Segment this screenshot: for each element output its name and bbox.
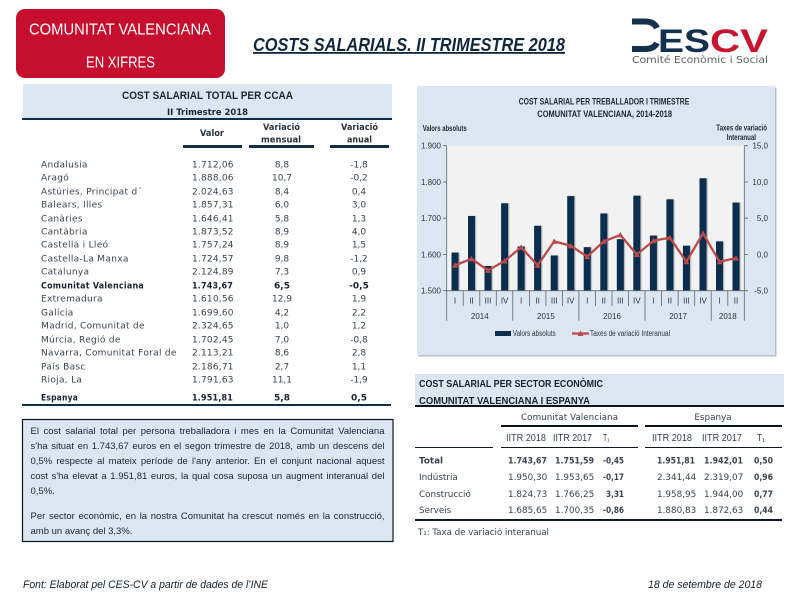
- region rows: 2,2: [352, 308, 366, 318]
- region rows: 1.757,24: [192, 240, 234, 250]
- group headers: Comunitat Valenciana: [521, 413, 618, 423]
- quarter labels: I: [454, 296, 456, 306]
- quarter labels: IV: [699, 296, 707, 306]
- table heading band: [22, 84, 392, 120]
- column headers: Valor: [200, 129, 225, 139]
- region rows: 1.724,57: [192, 254, 234, 264]
- region rows: 9,8: [275, 254, 289, 264]
- left axis labels: 1.800: [421, 178, 442, 187]
- quarter labels: III: [683, 296, 690, 306]
- region rows: 8,9: [275, 227, 289, 237]
- table heading band: COST SALARIAL PER SECTOR ECONÒMIC: [419, 377, 603, 390]
- left axis labels: [421, 142, 442, 296]
- region rows: 7,0: [275, 335, 289, 345]
- region rows: Madrid, Comunitat de: [41, 321, 145, 331]
- region rows: -1,9: [350, 375, 368, 385]
- sector rows: 3,31: [606, 490, 624, 500]
- quarter labels: III: [617, 296, 624, 306]
- region rows: 11,1: [272, 375, 292, 385]
- quarter labels: I: [718, 296, 721, 306]
- column headers: IITR 2017: [702, 433, 742, 444]
- sector rows: 1.942,01: [704, 457, 743, 467]
- region rows: 1.857,31: [192, 200, 234, 210]
- region rows: Aragó: [41, 172, 69, 183]
- right axis labels: 5,0: [757, 214, 769, 223]
- panel: cost salarial per sector econòmic table: [415, 374, 784, 538]
- chart title: [519, 97, 689, 119]
- right axis labels: 10,0: [752, 178, 769, 187]
- region rows: 1,3: [352, 214, 366, 224]
- sector rows: 1.872,63: [704, 506, 743, 516]
- table heading band: [415, 374, 784, 407]
- table heading band: COMUNITAT VALENCIANA I ESPANYA: [419, 395, 590, 407]
- region rows: Comunitat Valenciana: [41, 281, 144, 291]
- legend: [495, 329, 670, 338]
- region rows: 10,7: [272, 173, 292, 183]
- axis titles: [423, 123, 767, 142]
- region rows: 2.186,71: [192, 362, 234, 372]
- left axis labels: 1.700: [421, 214, 442, 223]
- quarter labels: II: [602, 296, 606, 306]
- region rows: Extremadura: [41, 294, 103, 304]
- sector rows: 0,96: [754, 473, 773, 483]
- column headers: anual: [347, 136, 372, 146]
- column headers: IITR 2017: [553, 433, 592, 444]
- sector rows: Total: [419, 457, 443, 467]
- sector rows: 1.685,65: [508, 506, 547, 516]
- text block: summary: El cost salarial total per persona treballadora i mes en la Comunitat Valenciana: [30, 426, 384, 436]
- table heading band: COST SALARIAL TOTAL PER CCAA: [122, 90, 293, 102]
- region rows: 1.951,81: [192, 393, 233, 403]
- column headers: IITR 2018: [506, 433, 546, 444]
- region rows: País Basc: [41, 362, 86, 372]
- panel: line and bar chart: [417, 86, 776, 356]
- badge: Comunitat Valenciana en xifres: [16, 9, 225, 78]
- legend: Taxes de variació Interanual: [590, 329, 670, 338]
- text block: summary: cost s'ha elevat a 1.951,81 euros, la qual cosa suposa un augment interanual del: [30, 470, 384, 482]
- region rows: -1,2: [350, 254, 368, 264]
- sector rows: [415, 457, 782, 521]
- logo: CES CV: CV: [710, 23, 769, 59]
- region rows: 12,9: [272, 294, 292, 304]
- region rows: 4,2: [275, 308, 289, 318]
- region rows: Castella i Lleó: [41, 239, 109, 250]
- region rows: 2.324,65: [192, 321, 234, 331]
- sector rows: 1.958,95: [657, 490, 696, 500]
- logo: CES CV: Comité Econòmic i Social: [632, 54, 768, 66]
- line: taxes de variació interanual: [452, 230, 739, 273]
- title: COSTS SALARIALS. II TRIMESTRE 2018: [253, 35, 565, 55]
- region rows: Castella-La Manxa: [41, 254, 129, 264]
- date: 18 de setembre de 2018: [648, 579, 763, 591]
- region rows: Astúries, Principat d´: [41, 186, 142, 197]
- year labels: 2018: [719, 312, 737, 321]
- group headers: [501, 413, 782, 427]
- region rows: 1.702,45: [192, 335, 234, 345]
- region rows: 2,7: [275, 362, 289, 372]
- sector rows: 0,77: [754, 490, 773, 500]
- footnote: T₁: Taxa de variació interanual: [417, 527, 549, 538]
- sector rows: 1.766,25: [555, 490, 594, 500]
- region rows: 1.646,41: [192, 214, 234, 224]
- axis titles: Interanual: [727, 133, 756, 142]
- column headers: T₁: [603, 433, 610, 444]
- region rows: [22, 160, 391, 406]
- axis titles: Taxes de variació: [716, 123, 767, 132]
- quarter labels: IV: [633, 296, 641, 306]
- sector rows: 1.880,83: [657, 506, 696, 516]
- axes and category separators: [443, 146, 748, 321]
- sector rows: Construcció: [419, 489, 471, 500]
- axis titles: Valors absoluts: [423, 124, 467, 133]
- bars: valors absoluts: [452, 178, 740, 291]
- quarter labels: II: [668, 296, 672, 306]
- table heading band: II Trimestre 2018: [167, 108, 248, 118]
- region rows: Espanya: [41, 393, 78, 403]
- chart title: COMUNITAT VALENCIANA, 2014-2018: [537, 109, 672, 119]
- region rows: 1,1: [352, 362, 366, 372]
- region rows: 4,0: [352, 227, 366, 237]
- sector rows: 2.341,44: [657, 473, 697, 483]
- left axis labels: 1.500: [421, 286, 442, 296]
- sector rows: 1.751,59: [555, 457, 594, 467]
- sector rows: Serveis: [419, 506, 452, 516]
- quarter labels: I: [586, 296, 588, 306]
- region rows: 2.024,63: [192, 187, 234, 197]
- sector rows: -0,45: [603, 457, 624, 467]
- column headers: Variació: [341, 122, 378, 133]
- column headers: mensual: [261, 136, 301, 146]
- year labels: 2015: [537, 312, 555, 321]
- text block: summary: s'ha situat en 1.743,67 euros en el segon trimestre de 2018, amb un descens del: [30, 440, 384, 452]
- region rows: 1.699,60: [192, 308, 234, 318]
- quarter labels: I: [652, 296, 655, 306]
- region rows: 1,9: [352, 294, 366, 304]
- region rows: Rioja, La: [41, 375, 82, 385]
- column headers: IITR 2018: [652, 433, 692, 444]
- text block: summary: 0,5% respecte al mateix període de l'any anterior. En el conjunt nacional aquest: [30, 456, 384, 466]
- logo: CES CV: ES: [658, 23, 710, 59]
- quarter labels: I: [520, 296, 522, 306]
- right axis labels: 0,0: [757, 250, 769, 259]
- plot area: [447, 146, 744, 291]
- badge: Comunitat Valenciana en xifres: EN XIFRES: [86, 54, 155, 72]
- column headers: [415, 433, 782, 448]
- legend: Valors absoluts: [513, 329, 556, 338]
- region rows: 5,8: [275, 214, 289, 224]
- region rows: Balears, Illes: [41, 200, 102, 210]
- region rows: 1,0: [275, 321, 289, 331]
- text block: summary: amb un avanç del 3,3%.: [30, 526, 132, 536]
- sector rows: Indústria: [419, 473, 458, 483]
- region rows: Andalusia: [41, 160, 88, 170]
- region rows: 1,5: [352, 240, 366, 250]
- text block: summary: [22, 420, 393, 542]
- quarter labels: III: [485, 296, 491, 306]
- region rows: 2.113,21: [192, 348, 234, 358]
- region rows: 2.124,89: [192, 267, 234, 277]
- region rows: Múrcia, Regió de: [41, 334, 121, 345]
- sector rows: 1.950,30: [508, 473, 548, 483]
- region rows: 8,4: [275, 187, 289, 197]
- region rows: 0,9: [352, 267, 366, 277]
- region rows: -0,2: [350, 173, 368, 183]
- region rows: 8,9: [275, 240, 289, 250]
- source note: Font: Elaborat pel CES-CV a partir de dades de l’INE: [23, 579, 269, 591]
- region rows: 3,0: [352, 200, 366, 210]
- sector rows: 1.951,81: [657, 457, 695, 467]
- panel: cost salarial total per CCAA table: [22, 84, 392, 406]
- region rows: 1.791,63: [192, 375, 234, 385]
- region rows: -0,8: [350, 335, 368, 345]
- region rows: Canàries: [41, 214, 83, 224]
- year labels: 2017: [669, 312, 688, 321]
- sector rows: 1.743,67: [508, 457, 547, 467]
- right axis labels: -5,0: [754, 286, 769, 296]
- region rows: -1,8: [350, 160, 368, 170]
- column headers: [183, 122, 389, 148]
- region rows: 1,2: [352, 321, 366, 331]
- badge: Comunitat Valenciana en xifres: COMUNITAT VALENCIANA: [29, 22, 211, 38]
- left axis labels: 1.900: [421, 142, 442, 150]
- sector rows: 1.953,65: [555, 473, 594, 483]
- year labels: [471, 312, 737, 321]
- column headers: Variació: [263, 122, 300, 133]
- group headers: Espanya: [694, 413, 732, 423]
- region rows: 1.712,06: [192, 160, 234, 170]
- quarter labels: IV: [501, 296, 509, 306]
- sector rows: 0,50: [754, 457, 773, 467]
- right axis labels: 15,0: [752, 142, 769, 150]
- region rows: Catalunya: [41, 267, 89, 277]
- region rows: 1.610,56: [192, 294, 234, 304]
- quarter labels: II: [469, 296, 474, 306]
- region rows: 1.888,06: [192, 173, 234, 183]
- region rows: 5,8: [274, 393, 290, 403]
- text block: summary: Per sector econòmic, en la nostra Comunitat ha crescut només en la construcció,: [30, 510, 384, 522]
- region rows: 6,0: [275, 200, 289, 210]
- region rows: 7,3: [275, 267, 289, 277]
- region rows: 0,4: [352, 187, 366, 197]
- year labels: 2014: [471, 312, 489, 321]
- quarter labels: III: [551, 296, 558, 306]
- quarter labels: IV: [567, 296, 575, 306]
- sector rows: 1.700,35: [555, 506, 594, 516]
- region rows: 0,5: [351, 393, 367, 403]
- region rows: Cantàbria: [41, 227, 88, 237]
- region rows: 2,8: [352, 348, 366, 358]
- region rows: Galícia: [41, 308, 74, 318]
- right axis labels: [752, 142, 769, 296]
- column headers: T₁: [757, 433, 766, 444]
- chart title: COST SALARIAL PER TREBALLADOR I TRIMESTRE: [519, 97, 689, 107]
- logo: CES CV: [632, 22, 769, 66]
- sector rows: 1.824,73: [508, 490, 547, 500]
- region rows: Navarra, Comunitat Foral de: [41, 348, 177, 358]
- sector rows: 1.944,00: [704, 490, 744, 500]
- region rows: 1.743,67: [192, 281, 233, 291]
- year labels: 2016: [603, 312, 621, 321]
- region rows: 6,5: [274, 281, 290, 291]
- left axis labels: 1.600: [421, 250, 442, 259]
- region rows: 1.873,52: [192, 227, 234, 237]
- quarter labels: II: [535, 296, 540, 306]
- sector rows: -0,17: [603, 473, 624, 483]
- region rows: -0,5: [349, 281, 369, 291]
- text block: summary: 0,5%.: [30, 486, 55, 496]
- sector rows: 0,44: [754, 506, 773, 516]
- region rows: 8,8: [275, 160, 289, 170]
- sector rows: 2.319,07: [704, 473, 743, 483]
- quarter labels: [454, 296, 738, 306]
- region rows: 8,6: [275, 348, 289, 358]
- sector rows: -0,86: [603, 506, 624, 516]
- quarter labels: II: [734, 296, 738, 306]
